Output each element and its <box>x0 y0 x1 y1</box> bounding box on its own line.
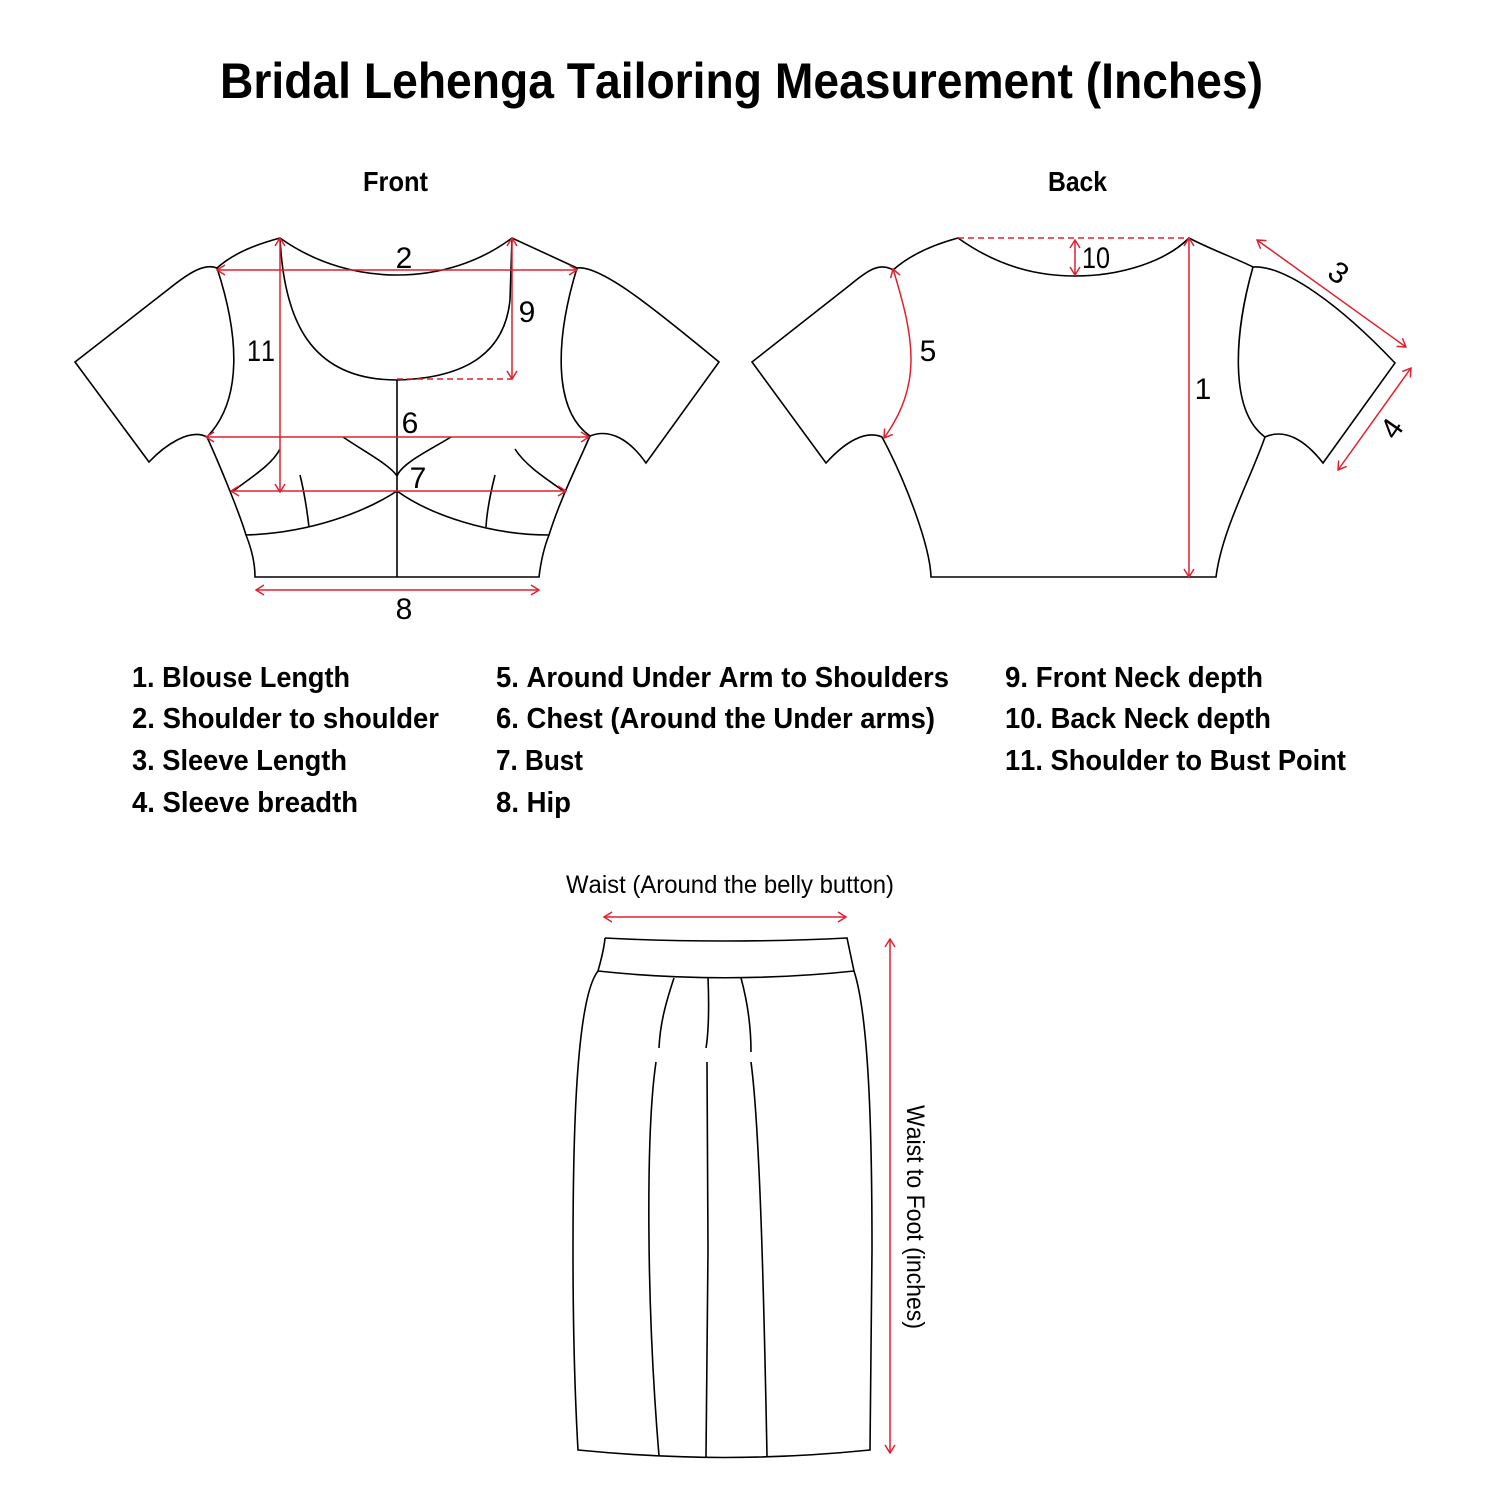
front blouse diagram <box>75 238 719 626</box>
front measurement numbers: 6 <box>402 407 418 440</box>
front measurement numbers: 11 <box>247 335 275 368</box>
measurement list: column 3: 9. Front Neck depth <box>1005 662 1263 694</box>
heading: front: Front <box>363 166 428 197</box>
waist to foot label: Waist to Foot (inches) <box>901 1105 929 1329</box>
measurement list: column 1 <box>132 662 439 819</box>
heading: back: Back <box>1048 166 1107 197</box>
measurement list: column 1: 1. Blouse Length <box>132 662 350 694</box>
back measurement numbers: 1 <box>1195 373 1211 406</box>
back blouse diagram <box>752 238 1411 577</box>
measurement list: column 2: 6. Chest (Around the Under arms) <box>496 703 935 735</box>
measurement list: column 2: 7. Bust <box>496 745 583 777</box>
waist label: Waist (Around the belly button) <box>566 871 894 899</box>
back measurement numbers: 10 <box>1082 242 1110 275</box>
front measurement numbers: 7 <box>410 462 426 495</box>
front measurement numbers: 9 <box>519 296 535 329</box>
back blouse outline <box>752 238 1395 577</box>
waist arrow <box>604 916 846 918</box>
measurement list: column 1: 4. Sleeve breadth <box>132 787 358 819</box>
back measurement numbers: 3 <box>1322 255 1355 291</box>
measurement list: column 2 <box>496 662 949 819</box>
measurement list: column 3: 10. Back Neck depth <box>1005 703 1271 735</box>
measurement list: column 1: 2. Shoulder to shoulder <box>132 703 439 735</box>
skirt diagram <box>573 938 872 1458</box>
front measurement numbers: 2 <box>396 242 412 275</box>
front measurement numbers: 8 <box>396 593 412 626</box>
title: Bridal Lehenga Tailoring Measurement (Inches) <box>220 53 1263 109</box>
front measurement numbers <box>247 242 535 626</box>
measurement list: column 3: 11. Shoulder to Bust Point <box>1005 745 1346 777</box>
back measurement numbers: 4 <box>1374 413 1411 445</box>
back measurement numbers: 5 <box>920 335 936 368</box>
measurement list: column 2: 8. Hip <box>496 787 571 819</box>
waist to foot arrow <box>889 939 891 1453</box>
measurement list: column 3 <box>1005 662 1346 777</box>
measurement list: column 1: 3. Sleeve Length <box>132 745 347 777</box>
front measurement arrows <box>206 238 589 590</box>
measurement list: column 2: 5. Around Under Arm to Shoulders <box>496 662 949 694</box>
front blouse outline <box>75 238 719 577</box>
back measurement arrows <box>884 238 1411 577</box>
back measurement numbers <box>920 242 1411 445</box>
